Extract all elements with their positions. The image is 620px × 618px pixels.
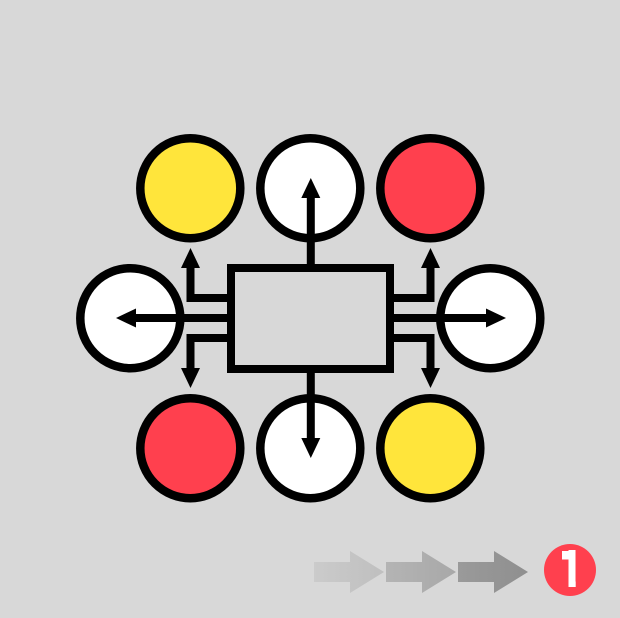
arrow: elbow to top right circle bbox=[390, 248, 440, 298]
arrow: right to middle right circle bbox=[390, 308, 506, 328]
step number badge: 1 bbox=[556, 539, 586, 599]
arrow: elbow to bottom right circle bbox=[390, 338, 440, 388]
arrow: down to bottom centre circle bbox=[301, 369, 320, 458]
infographic canvas bbox=[76, 134, 596, 596]
circle: bottom centre white bbox=[260, 398, 360, 498]
circle: top centre white bbox=[260, 138, 360, 238]
circle: middle right white bbox=[440, 268, 540, 368]
progress arrow: light bbox=[314, 551, 384, 593]
arrow: up to top centre circle bbox=[301, 178, 320, 268]
circle: top left yellow bbox=[140, 138, 240, 238]
central rectangle bbox=[231, 268, 390, 369]
circle: bottom left red bbox=[140, 398, 240, 498]
arrow: left to middle left circle bbox=[116, 308, 231, 328]
progress arrow: medium bbox=[386, 551, 456, 593]
arrow: elbow to bottom left circle bbox=[181, 338, 231, 388]
arrow: elbow to top left circle bbox=[181, 248, 231, 298]
circle: bottom right yellow bbox=[380, 398, 480, 498]
step number badge bbox=[544, 544, 596, 596]
progress arrow: dark bbox=[458, 551, 528, 593]
circle: top right red bbox=[380, 138, 480, 238]
circle: middle left white bbox=[80, 268, 180, 368]
